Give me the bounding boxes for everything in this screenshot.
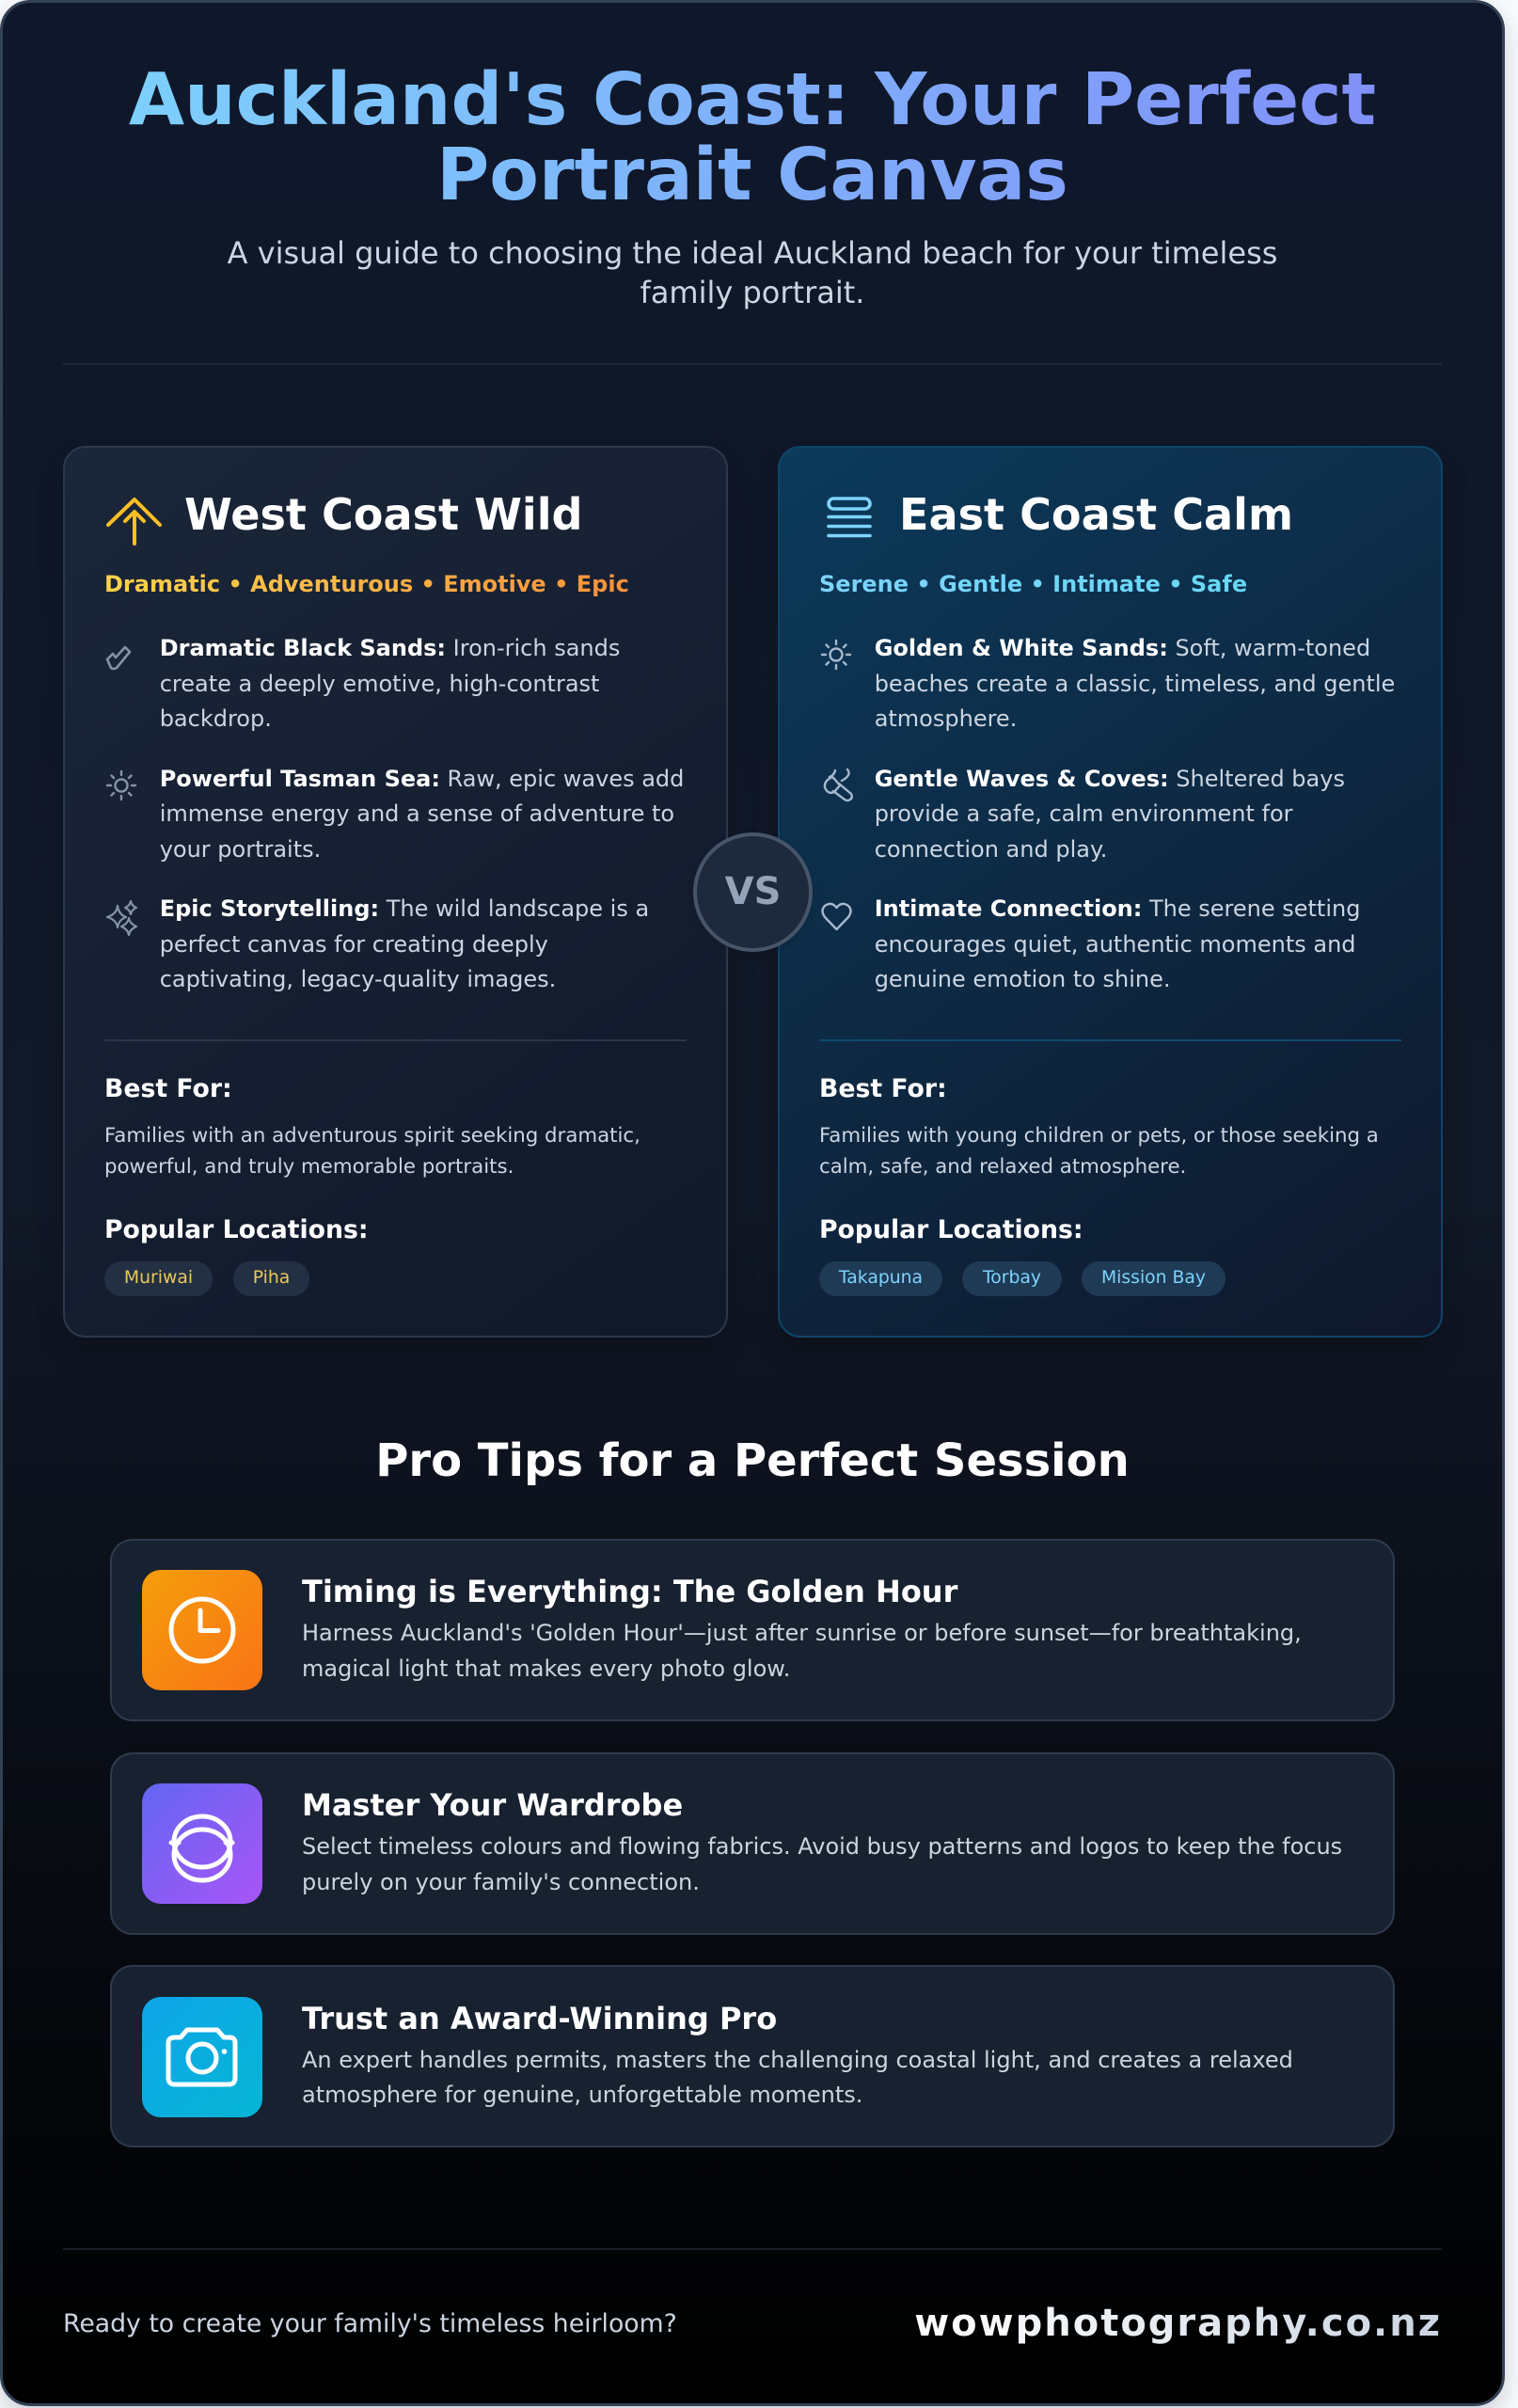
- VS badge: [693, 832, 813, 952]
- title: [63, 63, 1442, 214]
- west feature 3: perfect canvas for creating deeply: [160, 931, 548, 958]
- east feature 3: genuine emotion to shine.: [875, 966, 1171, 992]
- heading: East Coast Calm: East Coast Calm: [899, 489, 1293, 540]
- panel: East Coast Calm: [778, 446, 1443, 1338]
- tip 2 text: purely on your family's connection.: [302, 1868, 700, 1894]
- tip 2 text: Select timeless colours and flowing fabrics. Avoid busy patterns and logos to keep the focus: [302, 1833, 1342, 1860]
- tip 1 title: Timing is Everything: The Golden Hour: [302, 1574, 957, 1609]
- west best-for text: [104, 1124, 640, 1178]
- tip card: Wardrobe: [110, 1751, 1395, 1934]
- west best-for text: powerful, and truly memorable portraits.: [104, 1155, 514, 1178]
- west feature 2: Powerful Tasman Sea: Raw, epic waves add: [160, 766, 684, 792]
- icon: west coast arrow: [105, 497, 162, 546]
- location pill: Takapuna: [819, 1261, 942, 1296]
- west feature 1: [160, 635, 620, 732]
- heading: Pro Tips: Pro Tips for a Perfect Session: [375, 1434, 1130, 1487]
- tip 1 text: Harness Auckland's 'Golden Hour'—just after sunrise or before sunset—for breathtaking,: [302, 1620, 1302, 1646]
- icon: east coast waves: [827, 497, 872, 538]
- icon: camera: [166, 2028, 237, 2086]
- west locations heading: Popular Locations:: [104, 1215, 369, 1244]
- tip 3 text: An expert handles permits, masters the challenging coastal light, and creates a relaxed: [302, 2047, 1293, 2073]
- icon tile: camera: [142, 1996, 262, 2116]
- panel: West Coast Wild: [63, 446, 728, 1338]
- east best-for text: calm, safe, and relaxed atmosphere.: [819, 1155, 1186, 1178]
- tip 1 text: magical light that makes every photo glow.: [302, 1656, 790, 1682]
- east feature 3: [875, 895, 1360, 992]
- tip 2 text: [302, 1833, 1342, 1894]
- location pill: Takapuna: Takapuna: [839, 1268, 923, 1288]
- location pill: Piha: Piha: [253, 1268, 290, 1288]
- VS badge: VS: [725, 870, 781, 913]
- tip 3 title: Trust an Award-Winning Pro: [302, 2000, 777, 2036]
- east feature 1: Golden & White Sands: Soft, warm-toned: [875, 635, 1370, 661]
- east feature 2: connection and play.: [875, 836, 1107, 863]
- icon: wardrobe rings: [169, 1814, 235, 1883]
- location pill: Mission Bay: Mission Bay: [1101, 1268, 1206, 1288]
- title: Portrait Canvas: [436, 134, 1068, 217]
- east feature 2: [875, 766, 1345, 863]
- east feature 1: atmosphere.: [875, 705, 1017, 732]
- title: Auckland's Coast: Your Perfect: [129, 58, 1376, 142]
- location pill: Torbay: Torbay: [983, 1268, 1041, 1288]
- tip 3 text: atmosphere for genuine, unforgettable moments.: [302, 2082, 862, 2108]
- subtitle: A visual guide to choosing the ideal Auckland beach for your timeless: [228, 235, 1277, 271]
- location pill: Mission Bay: [1082, 1261, 1225, 1296]
- subtitle: [228, 235, 1277, 310]
- tip card: Pro: [110, 1965, 1395, 2147]
- west best-for heading: Best For:: [104, 1074, 232, 1102]
- icon: sun: [820, 640, 852, 670]
- east tagline: Serene • Gentle • Intimate • Safe: [819, 570, 1247, 596]
- east best-for text: Families with young children or pets, or those seeking a: [819, 1124, 1379, 1148]
- tip 1 text: [302, 1620, 1302, 1682]
- west feature 3: [160, 895, 649, 992]
- west feature 2: immense energy and a sense of adventure to: [160, 800, 674, 827]
- tip card: Golden Hour: [110, 1539, 1395, 1721]
- west feature 3: Epic Storytelling: The wild landscape is a: [160, 895, 649, 922]
- icon tile: clock: [142, 1570, 262, 1690]
- icon: heart: [821, 903, 852, 931]
- west best-for text: Families with an adventurous spirit seeking dramatic,: [104, 1124, 640, 1148]
- east feature 1: beaches create a classic, timeless, and gentle: [875, 671, 1395, 697]
- east best-for heading: Best For:: [819, 1074, 947, 1102]
- location pill: Muriwai: [104, 1261, 213, 1296]
- west feature 1: create a deeply emotive, high-contrast: [160, 671, 599, 697]
- east best-for text: [819, 1124, 1379, 1178]
- icon: check: [105, 645, 132, 670]
- west feature 1: backdrop.: [160, 705, 272, 732]
- west feature 2: your portraits.: [160, 836, 321, 863]
- footer call to action: Ready to create your family's timeless heirloom?: [63, 2308, 677, 2338]
- heading: West Coast Wild: West Coast Wild: [184, 489, 583, 540]
- east feature 3: Intimate Connection: The serene setting: [875, 895, 1360, 922]
- west feature 1: Dramatic Black Sands: Iron-rich sands: [160, 635, 620, 661]
- west tagline: Dramatic • Adventurous • Emotive • Epic: [104, 570, 629, 596]
- west feature 3: captivating, legacy-quality images.: [160, 966, 556, 992]
- icon: clock: [169, 1597, 235, 1663]
- subtitle: family portrait.: [640, 275, 864, 310]
- location pill: Piha: [233, 1261, 309, 1296]
- east feature 1: [875, 635, 1395, 732]
- east feature 2: provide a safe, calm environment for: [875, 800, 1293, 827]
- icon tile: wardrobe: [142, 1783, 262, 1904]
- east feature 3: encourages quiet, authentic moments and: [875, 931, 1356, 958]
- icon: sun: [105, 769, 137, 801]
- west feature 2: [160, 766, 684, 863]
- east feature 2: Gentle Waves & Coves: Sheltered bays: [875, 766, 1345, 792]
- icon: tool: [824, 768, 853, 801]
- footer website: wowphotography.co.nz: [914, 2302, 1442, 2345]
- location pill: Torbay: [962, 1261, 1062, 1296]
- tip 2 title: Master Your Wardrobe: [302, 1787, 683, 1823]
- east locations heading: Popular Locations:: [819, 1215, 1083, 1244]
- icon: sparkles: [105, 899, 137, 937]
- tip 3 text: [302, 2047, 1293, 2108]
- location pill: Muriwai: Muriwai: [124, 1268, 193, 1288]
